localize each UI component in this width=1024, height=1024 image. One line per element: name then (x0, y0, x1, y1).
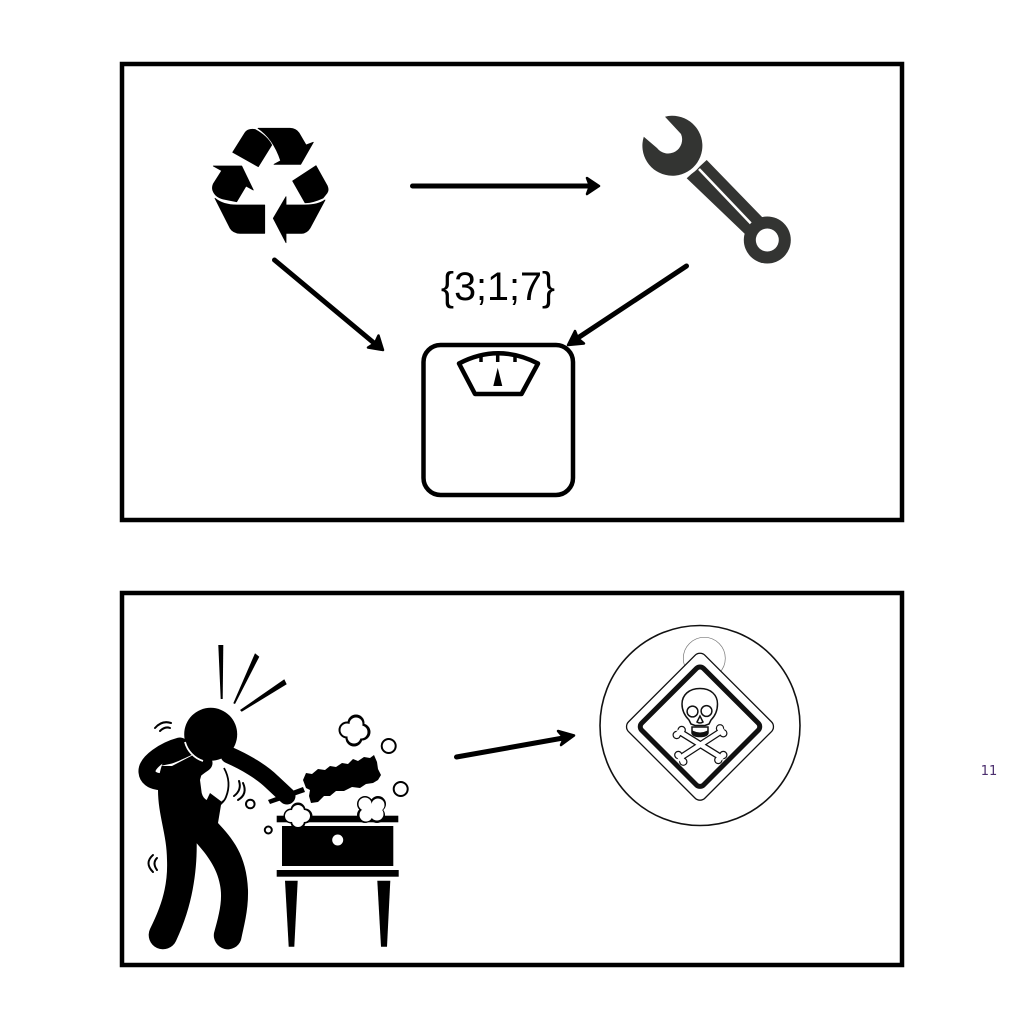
cloth (200, 758, 228, 802)
arrow: wrench to scale (568, 266, 686, 345)
icon: wrench (640, 112, 791, 264)
person body and legs (149, 740, 248, 949)
icon: dust cloud upper (338, 714, 370, 746)
arrow: recycle to wrench (412, 178, 599, 194)
icon: dust bubbles (246, 739, 408, 834)
cloth edge (222, 768, 228, 802)
icon: poison hazard badge (600, 626, 800, 826)
icon: motion marks (148, 722, 245, 872)
furniture: side table (277, 816, 399, 947)
panel: top frame (122, 64, 902, 520)
figure: coughing person (147, 708, 287, 949)
hanging ring (683, 637, 725, 679)
person duster arm (229, 755, 287, 796)
arrow: recycle to scale (274, 260, 383, 350)
head outline gap (185, 742, 203, 761)
inner diamond (638, 665, 762, 789)
elbow gap line (160, 753, 197, 766)
icon: feather duster (268, 755, 381, 804)
panel: bottom frame (122, 593, 902, 965)
outer diamond (624, 650, 776, 803)
person raised arm (147, 746, 204, 782)
person head (184, 708, 237, 761)
icon: alert rays above head (218, 645, 287, 712)
label: triple value: {3;1;7} (441, 265, 555, 309)
icon: weighing scale (424, 345, 573, 495)
icon: dust clouds on table (284, 796, 386, 830)
badge circle (600, 626, 800, 826)
page number: 11 (981, 764, 997, 779)
skull (682, 688, 718, 736)
crossbones (672, 724, 728, 766)
icon: recycle symbol (212, 128, 328, 243)
arrow: exposure to hazard (456, 731, 574, 757)
